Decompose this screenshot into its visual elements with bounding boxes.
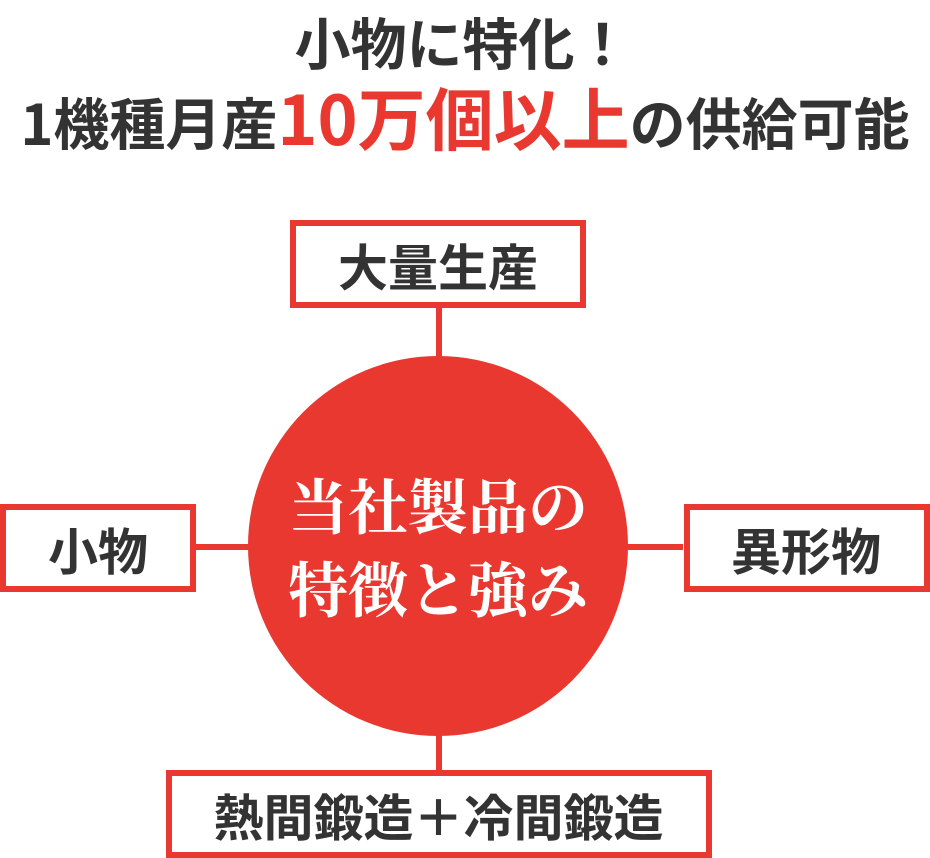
center circle: 当社製品の [288, 461, 588, 547]
box: 大量生産: 大量生産 [338, 229, 538, 301]
title: 小物に特化！ [294, 1, 630, 82]
box: 異形物: 異形物 [731, 513, 881, 585]
box: 異形物 [687, 507, 927, 589]
title: 1機種月産10万個以上の供給可能 [20, 66, 910, 165]
box: 熱間鍛造＋冷間鍛造: 熱間鍛造＋冷間鍛造 [214, 779, 664, 851]
title [20, 1, 910, 165]
box: 小物 [3, 507, 193, 589]
center circle: 特徴と強み [288, 544, 588, 630]
connector lines [194, 306, 683, 772]
box: 小物: 小物 [48, 513, 148, 585]
center circle [248, 356, 628, 736]
box: 大量生産 [293, 223, 583, 305]
